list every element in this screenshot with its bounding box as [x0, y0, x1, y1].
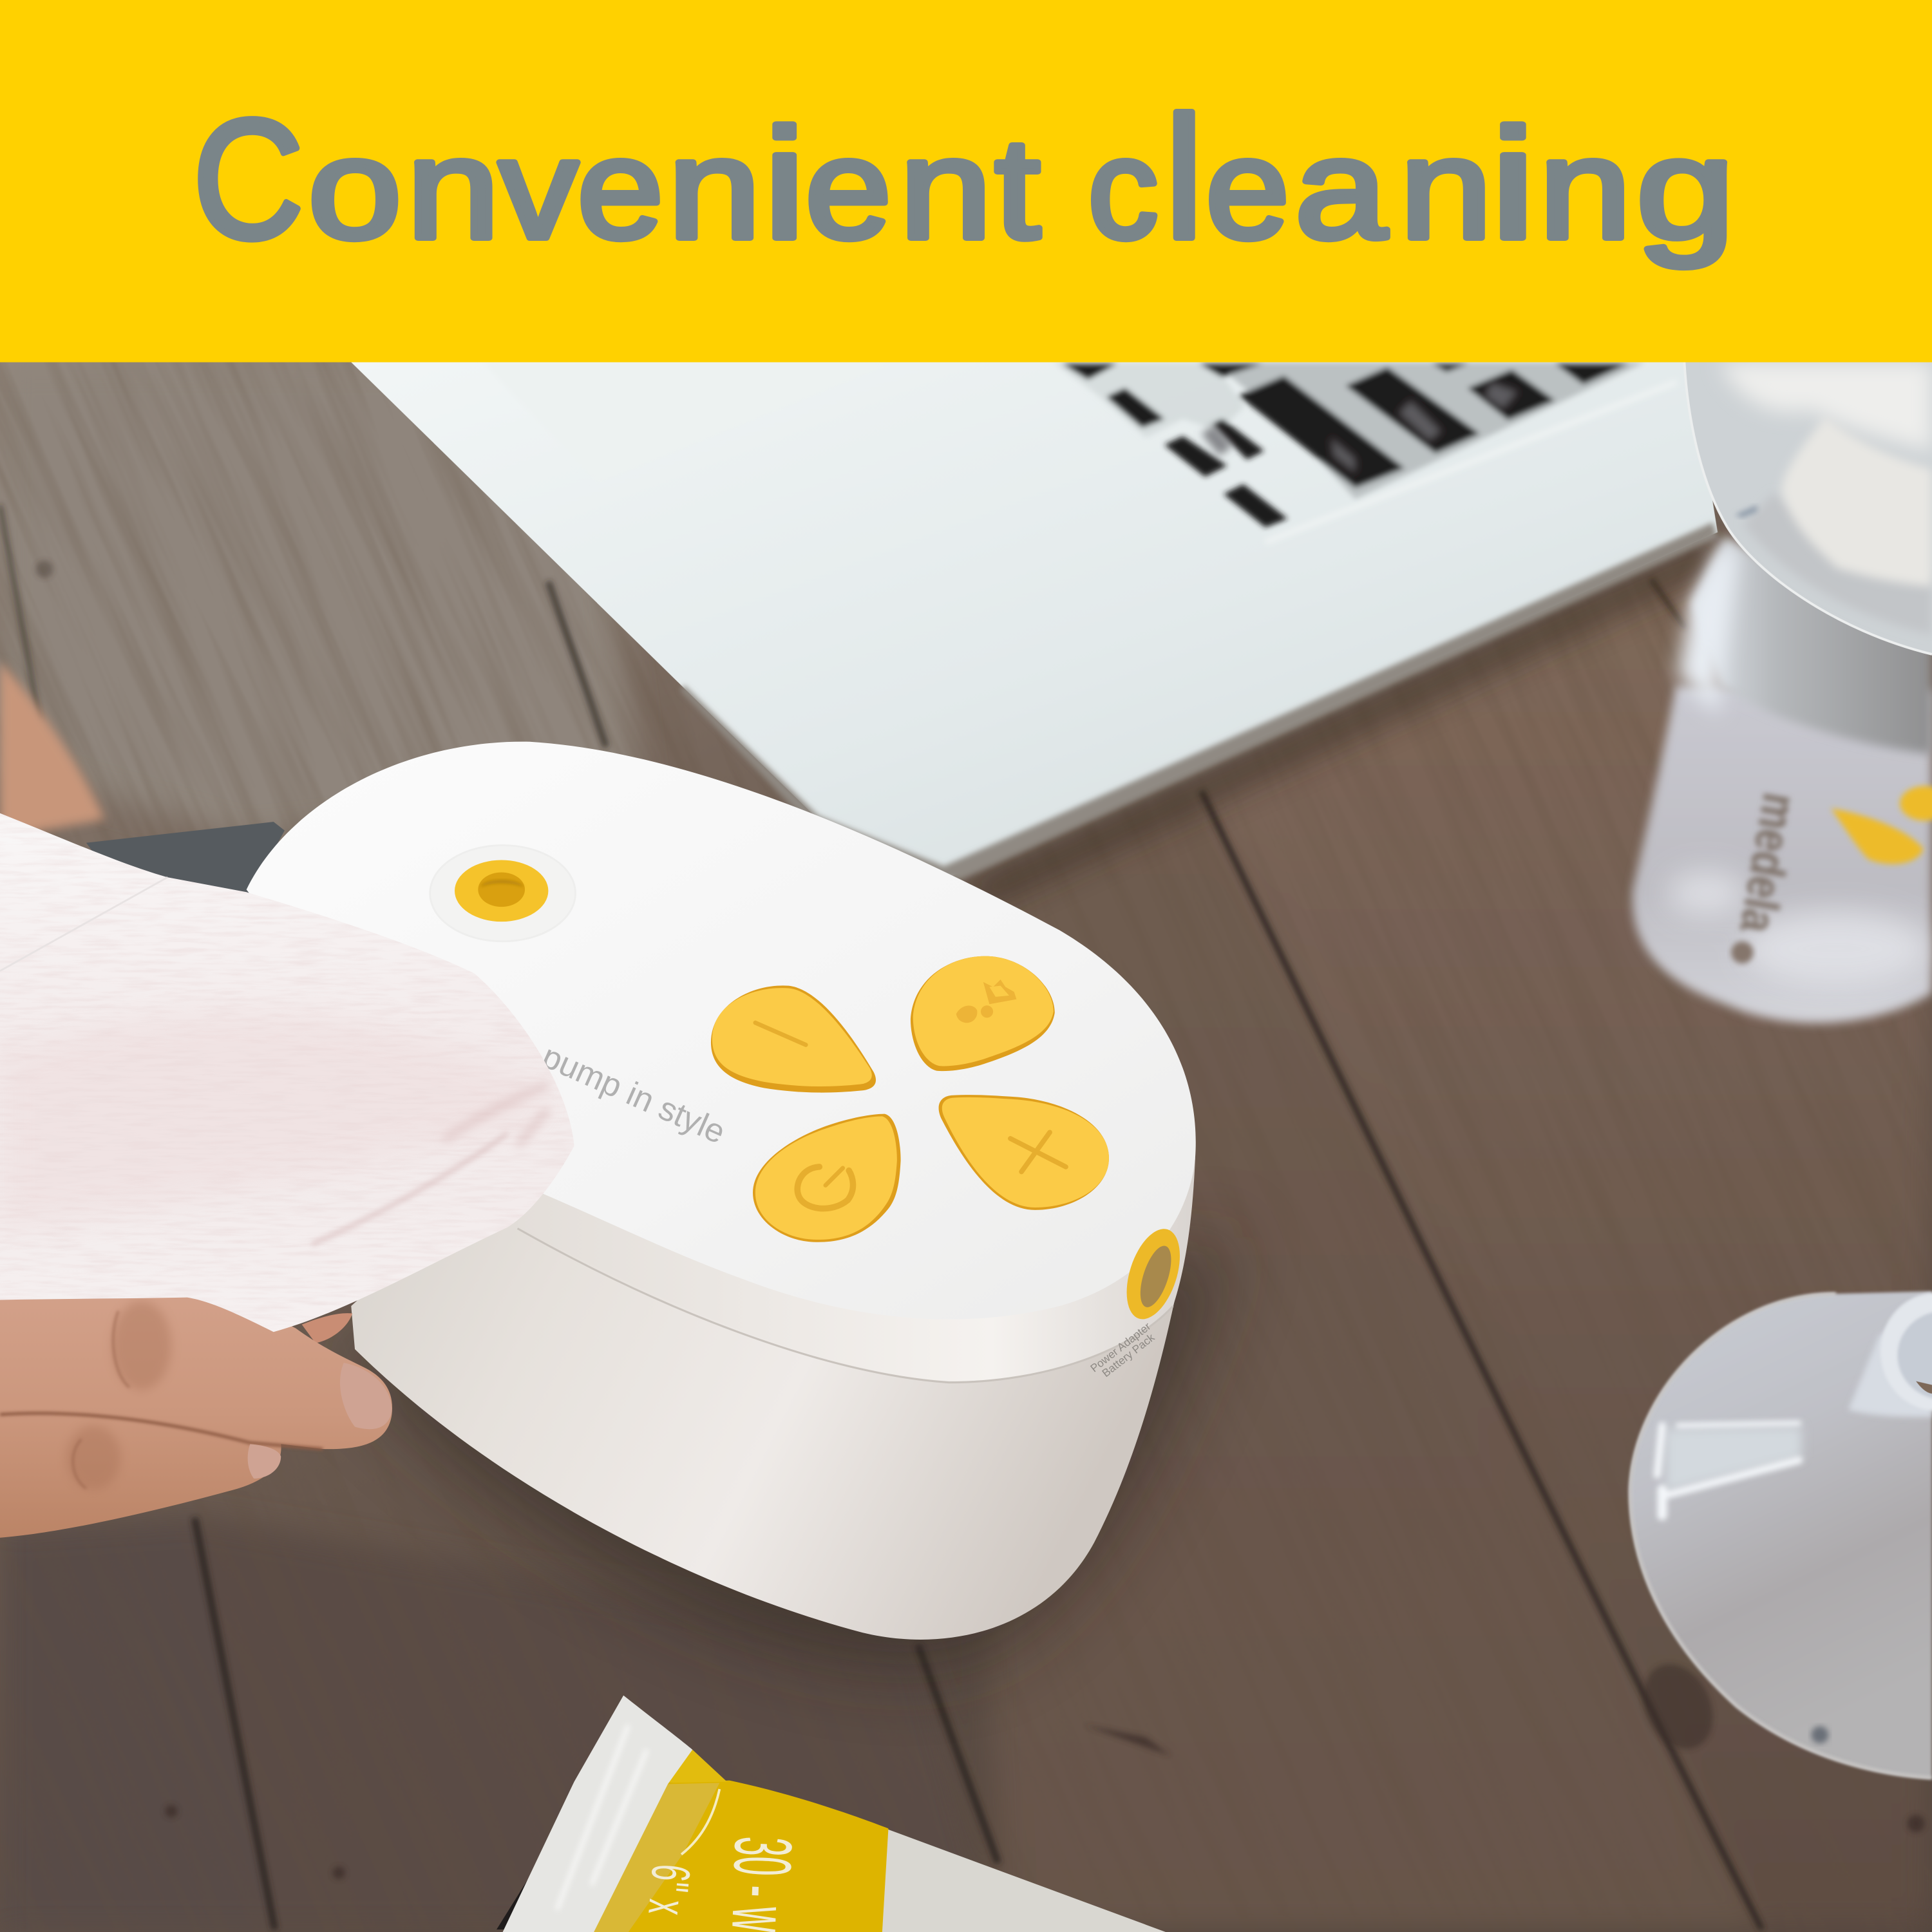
- wood knots: [35, 561, 1925, 1879]
- title: n: [900, 109, 992, 269]
- title: n: [1539, 109, 1631, 269]
- title: n: [668, 109, 761, 269]
- title: v: [499, 109, 578, 269]
- title: a: [1295, 109, 1387, 269]
- title: g: [1636, 109, 1735, 269]
- packet text: 30 - w: [715, 1835, 809, 1932]
- title: e: [805, 109, 891, 269]
- title: o: [308, 109, 402, 269]
- pump top surface: [247, 742, 1196, 1320]
- yellow header band: [0, 0, 1932, 362]
- pump shadow: [333, 1232, 1232, 1666]
- button: minus: [711, 985, 876, 1093]
- button: power: [753, 1114, 901, 1242]
- title: e: [577, 109, 663, 269]
- title: i: [763, 97, 806, 271]
- flange highlights: [1666, 1427, 1801, 1491]
- laptop shadow: [973, 552, 1719, 897]
- bottle drop logo: [1831, 786, 1932, 864]
- pump device: [247, 742, 1196, 1640]
- packet dark edge: [497, 1844, 557, 1929]
- knuckles: [112, 1301, 171, 1390]
- title: t: [995, 109, 1040, 269]
- button: let-down: [911, 956, 1055, 1071]
- top port: [430, 845, 575, 942]
- bottle logo text: medela: [1729, 789, 1808, 938]
- bottom flange: [1630, 1291, 1932, 1778]
- forearm: [0, 661, 105, 838]
- bottle: [1633, 537, 1932, 1023]
- packet yellow band: [594, 1781, 888, 1932]
- flange neck: [1848, 1306, 1932, 1417]
- side port: [1117, 1222, 1190, 1326]
- packet white body: [862, 1827, 1166, 1932]
- pump body: [351, 1146, 1190, 1640]
- lid band: [518, 1109, 1195, 1381]
- trackpad area: [483, 362, 893, 483]
- packet size text: 6" x: [637, 1862, 701, 1917]
- title: n: [406, 109, 500, 269]
- title: [193, 81, 1735, 275]
- title: c: [1088, 109, 1158, 269]
- laptop: [351, 362, 1718, 880]
- title: e: [1206, 109, 1289, 269]
- title: l: [1164, 81, 1204, 275]
- hand fingers: [0, 1289, 392, 1538]
- keyboard: [1054, 362, 1677, 542]
- top flange: [1684, 362, 1932, 654]
- bottle collar: [1690, 537, 1932, 754]
- third finger: [302, 1313, 352, 1343]
- wipes packet: [497, 1696, 1166, 1932]
- gray strap: [86, 822, 285, 900]
- button: plus: [939, 1095, 1109, 1210]
- cleaning wipe: [0, 813, 574, 1332]
- fingernails: [340, 1363, 392, 1429]
- side label text: Battery Pack: [1099, 1331, 1157, 1379]
- title: C: [193, 84, 304, 274]
- title: n: [1399, 109, 1492, 269]
- packet seal: [503, 1696, 692, 1932]
- title: i: [1490, 97, 1536, 271]
- side label text: Power Adapter: [1088, 1320, 1153, 1375]
- brand text: pump in style: [537, 1037, 731, 1151]
